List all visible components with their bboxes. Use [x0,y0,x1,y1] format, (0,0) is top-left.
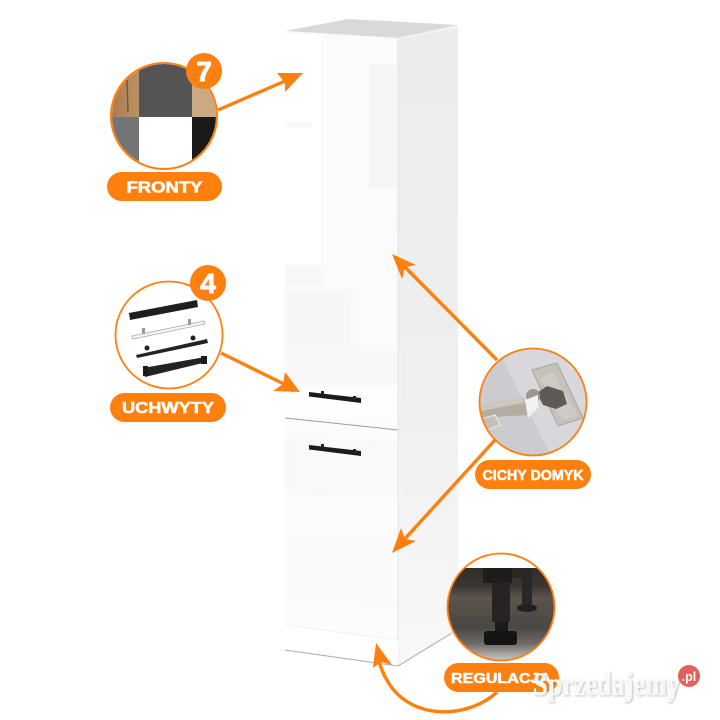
lower door [285,40,398,666]
arrow: hinge to lower door [392,440,495,553]
arrow: hinge to upper door [392,254,497,360]
seam [285,418,398,430]
watermark: Sprzedajemy [533,667,680,703]
handle samples [129,300,208,377]
.pl badge [678,665,700,687]
.pl badge: .pl [682,670,696,684]
panel: cichy domyk [475,348,591,489]
arrow: fronty [218,73,303,110]
badge 7: 7 [196,56,212,87]
cabinet [285,19,458,666]
arrow: curved to plinth [373,643,497,712]
badge 4 [190,265,226,301]
cabinet side [398,28,458,666]
drawer handle [309,391,361,403]
lower handle [309,444,361,456]
watermark: Sprzedajemy [534,668,681,704]
label [475,460,591,489]
upper door [285,33,398,430]
label [107,172,222,201]
cabinet top [285,19,458,38]
leveling foot photo [445,568,560,660]
panel: fronty [107,53,222,201]
panel: regulacja [444,554,560,692]
label [110,393,226,422]
color swatches [112,64,216,162]
label: REGULACJA [451,670,551,687]
label: CICHY DOMYK [482,468,584,484]
badge 7 [186,53,222,89]
plinth [285,625,452,666]
label: UCHWYTY [122,400,214,417]
badge 4: 4 [200,268,216,299]
arrow: uchwyty [221,353,300,392]
label: FRONTY [126,180,203,196]
panel: uchwyty [110,265,226,422]
hinge photo [478,348,588,458]
